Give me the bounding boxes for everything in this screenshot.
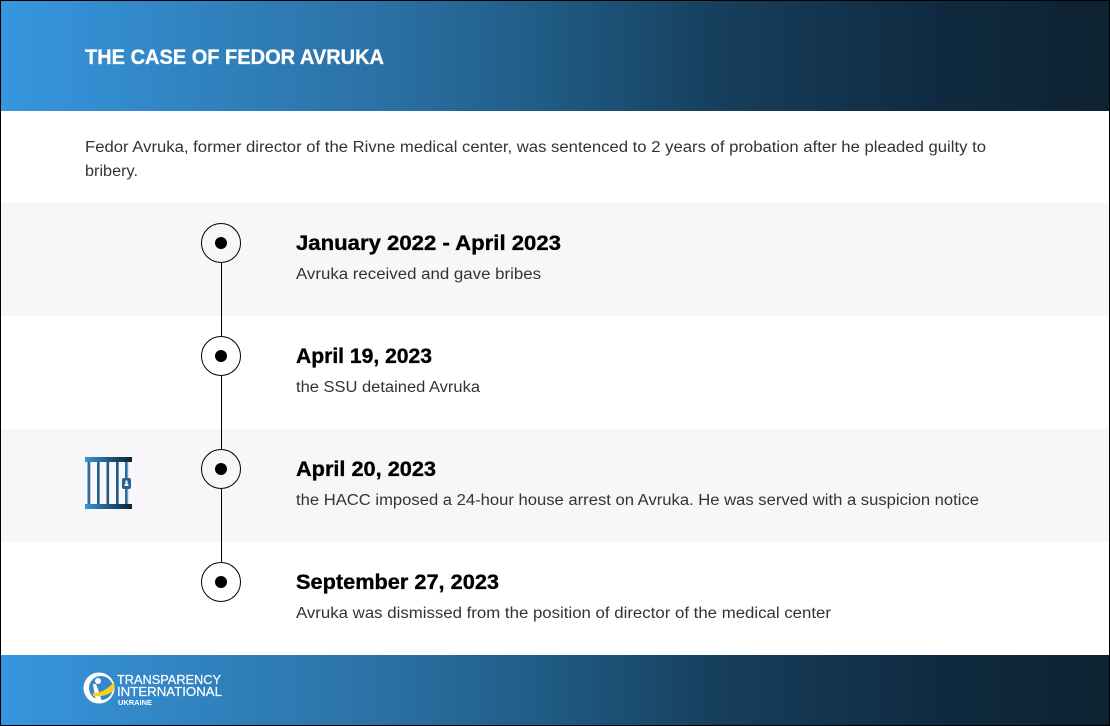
event: January 2022 - April 2023	[296, 232, 561, 283]
logo emblem	[84, 672, 114, 704]
marker: January 2022 - April 2023	[202, 224, 240, 262]
marker: September 27, 2023	[202, 562, 240, 602]
title: THE CASE OF FEDOR AVRUKA	[85, 46, 384, 69]
row background: April 20, 2023	[0, 429, 1110, 542]
marker: April 20, 2023	[202, 450, 240, 488]
intro text: bribery.	[85, 163, 138, 180]
event: September 27, 2023: Avruka was dismissed from the position of director of the medical center	[296, 605, 831, 622]
event: September 27, 2023: September 27, 2023	[296, 571, 499, 594]
row background: January 2022 - April 2023	[0, 203, 1110, 316]
event: April 20, 2023: April 20, 2023	[296, 458, 436, 481]
marker: April 19, 2023	[202, 336, 240, 376]
event: January 2022 - April 2023: January 2022 - April 2023	[296, 232, 561, 255]
timeline	[202, 224, 240, 602]
event: April 20, 2023	[296, 458, 979, 509]
intro text: Fedor Avruka, former director of the Rivne medical center, was sentenced to 2 years of probation after he pleaded guilty to	[85, 139, 986, 156]
header band	[0, 0, 1110, 111]
event: April 19, 2023: the SSU detained Avruka	[296, 379, 480, 396]
intro text	[85, 139, 986, 180]
logo: Transparency International Ukraine: UKRAINE	[118, 700, 152, 707]
event: January 2022 - April 2023: Avruka received and gave bribes	[296, 266, 541, 283]
icon: prison bars	[85, 457, 132, 509]
event: April 19, 2023	[296, 345, 480, 396]
event: April 20, 2023: the HACC imposed a 24-hour house arrest on Avruka. He was served with a suspicion notice	[296, 492, 979, 509]
event: April 19, 2023: April 19, 2023	[296, 345, 432, 368]
event: September 27, 2023	[296, 571, 831, 622]
logo: Transparency International Ukraine	[84, 672, 222, 707]
logo: Transparency International Ukraine: INTERNATIONAL	[117, 685, 222, 699]
logo: Transparency International Ukraine: TRANSPARENCY	[117, 673, 222, 687]
footer band	[0, 655, 1110, 726]
